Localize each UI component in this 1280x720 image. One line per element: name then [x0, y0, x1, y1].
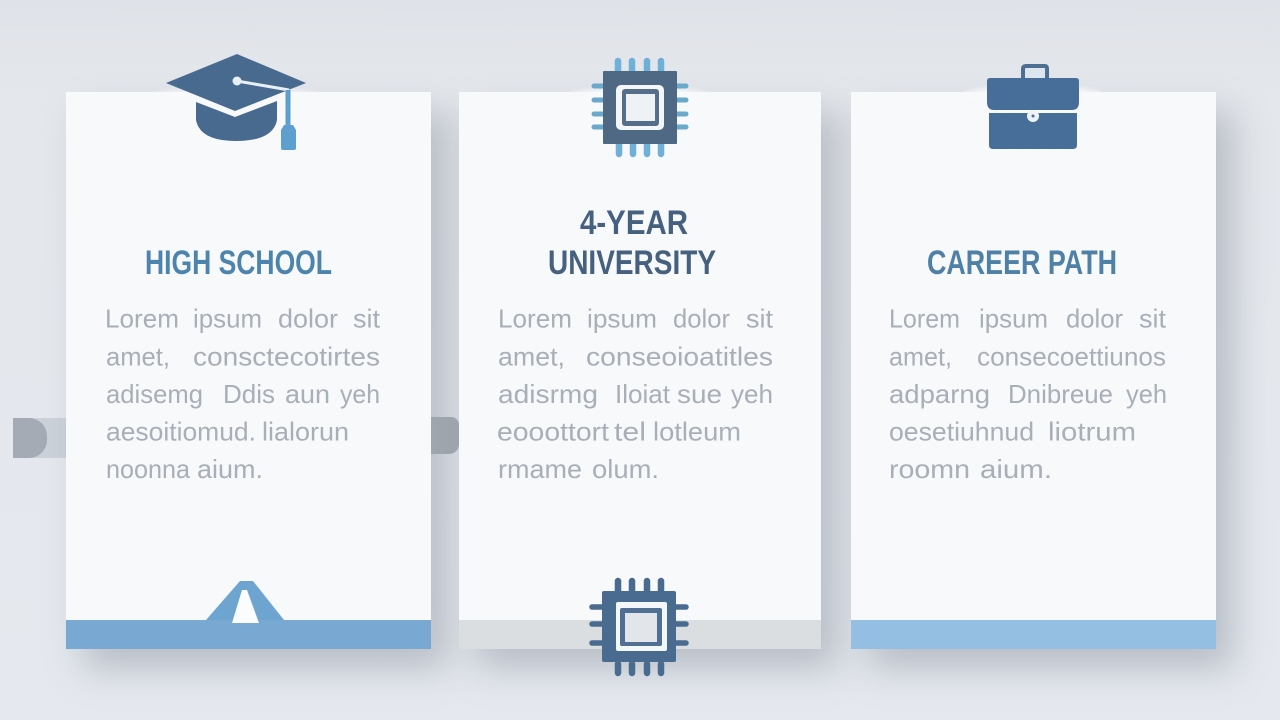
text block: university: tel	[614, 416, 646, 446]
text block: high school: lialorun	[262, 416, 349, 446]
text block: career path: amet,	[889, 342, 952, 372]
text block: career path: liotrum	[1048, 416, 1136, 446]
text block: university: Iloiat	[615, 379, 671, 409]
text block: high school: dolor	[278, 304, 338, 334]
text block: high school: aun	[285, 379, 330, 409]
text block: university: yeh	[731, 379, 773, 409]
text block: university: Lorem	[498, 304, 572, 334]
text block: university: eooottort	[497, 416, 610, 446]
text block: career path: oesetiuhnud	[889, 416, 1034, 446]
icon: chip top	[592, 58, 688, 158]
text block: high school: sit	[353, 304, 381, 334]
text block: high school: ipsum	[193, 304, 262, 334]
text block: career path: Dnibreue	[1008, 379, 1113, 409]
base bar	[851, 620, 1216, 649]
text block: high school: Lorem	[105, 304, 179, 334]
text block: high school: Ddis	[223, 379, 275, 409]
heading: 4-year university: 4-YEAR	[580, 204, 688, 242]
base bar	[459, 620, 821, 649]
text block: university: amet,	[498, 342, 565, 372]
text block: high school	[105, 304, 381, 484]
base bar	[66, 620, 431, 649]
text block: high school: noonna	[106, 454, 191, 484]
text block: career path: yeh	[1126, 379, 1167, 409]
text block: university: dolor	[673, 304, 730, 334]
text block: university: sue	[677, 379, 722, 409]
heading: career path: CAREER PATH	[927, 244, 1117, 282]
text block: career path: consecoettiunos	[977, 342, 1166, 372]
connector tab middle	[431, 417, 459, 454]
text block: career path: Lorem	[889, 304, 960, 334]
text block: university: olum.	[592, 454, 659, 484]
text block: university: rmame	[498, 454, 582, 484]
connector tab left	[13, 418, 66, 458]
triangle marker	[206, 581, 284, 623]
text block: career path	[889, 304, 1167, 484]
text block: career path: adparng	[889, 379, 990, 409]
text block: high school: yeh	[340, 379, 380, 409]
text block: university: conseoioatitles	[586, 342, 773, 372]
heading: high school: HIGH SCHOOL	[145, 244, 332, 282]
text block: university: lotleum	[653, 416, 741, 446]
text block: university	[497, 304, 774, 484]
text block: career path: sit	[1139, 304, 1167, 334]
text block: career path: aium.	[980, 454, 1052, 484]
text block: high school: amet,	[106, 342, 170, 372]
text block: university: ipsum	[587, 304, 657, 334]
text block: high school: consctecotirtes	[193, 342, 380, 372]
heading: 4-year university: UNIVERSITY	[548, 244, 716, 282]
text block: career path: ipsum	[979, 304, 1048, 334]
text block: career path: roomn	[889, 454, 970, 484]
text block: high school: adisemg	[106, 379, 203, 409]
icon: chip bottom	[589, 578, 689, 676]
panel: career path	[851, 92, 1216, 649]
text block: high school: aesoitiomud.	[106, 416, 256, 446]
icon: graduation cap	[166, 54, 306, 150]
panel: university	[459, 92, 821, 649]
panel: high school	[66, 92, 431, 649]
text block: university: adisrmg	[498, 379, 598, 409]
heading: 4-year university	[548, 204, 716, 282]
text block: high school: aium.	[197, 454, 263, 484]
text block: university: sit	[746, 304, 774, 334]
text block: career path: dolor	[1066, 304, 1123, 334]
icon: briefcase	[987, 64, 1079, 149]
